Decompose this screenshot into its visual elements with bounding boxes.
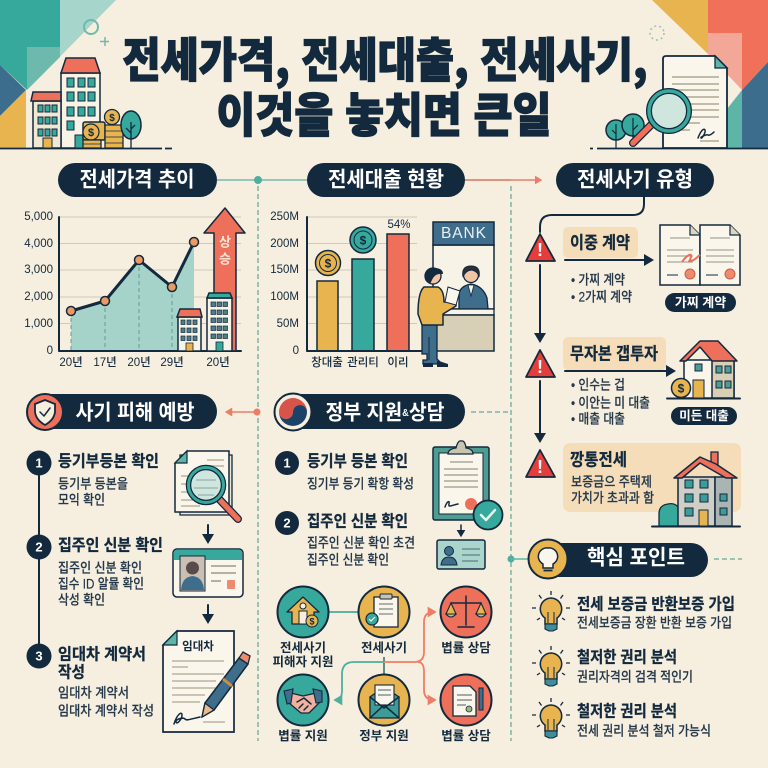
line chart: 전세가격 추이: 0 — [47, 345, 53, 357]
title: 전세가격, 전세대출, 전세사기, — [122, 22, 648, 91]
bar chart: 전세대출 현황: 50M — [277, 318, 299, 330]
step 1 — [275, 451, 414, 492]
step 1: 1 — [35, 456, 43, 470]
title — [122, 22, 648, 146]
key point 2: 철저한 권리 분석 — [577, 648, 677, 666]
line chart: 전세가격 추이: 29년 — [160, 355, 184, 369]
fraud type: 무자본 갭투자: 미든 대출 — [679, 409, 729, 423]
step 2: 2 — [35, 540, 43, 554]
heading: 핵심 포인트 — [508, 540, 742, 578]
bar chart: 전세대출 현황: 200M — [270, 238, 299, 250]
header corner pattern: right — [650, 0, 768, 148]
heading: 전세가격 추이 — [58, 163, 217, 197]
icon: lease contract and pen: 임대차 — [182, 639, 214, 653]
icon: bulb — [532, 591, 570, 631]
bar chart: 전세대출 현황 — [270, 211, 421, 369]
step 3: 임대차 계약서 작성 — [58, 704, 154, 718]
step 1 — [26, 450, 159, 508]
heading: 정부 지원&상담: 정부 지원&상담 — [326, 402, 444, 424]
icon: clipboard with check — [433, 441, 502, 530]
step 3: 임대차 계약서 — [58, 686, 129, 700]
icon: city buildings and coins: $ — [88, 127, 94, 139]
fraud type: 깡통전세 — [526, 443, 741, 526]
line chart: 전세가격 추이: 5,000 — [24, 211, 53, 223]
circle: 전세사기 — [358, 586, 410, 655]
step 2: 집주인 신분 확인 — [58, 536, 163, 554]
step 2: 집주인 신분 확인 — [307, 552, 389, 568]
circle: 볍률 상담 (document): 볍률 상담 — [441, 729, 491, 743]
bar chart: 전세대출 현황: 관리티 — [347, 356, 379, 369]
section divider lines — [258, 186, 511, 741]
icon: document, magnifier, trees — [606, 56, 727, 148]
bar chart: 전세대출 현황: $ — [360, 234, 367, 248]
fraud type: 깡통전세: ! — [537, 457, 543, 477]
arrow: clipboard to ID — [460, 525, 462, 535]
step 1: 등기부 등본을 — [58, 476, 128, 492]
line chart: 전세가격 추이: 20년 — [206, 355, 230, 369]
heading: 사기 피해 예방 — [27, 394, 217, 430]
fraud type: 이중 계약: ! — [537, 240, 543, 260]
circle: 볍률 상담 (scales) — [440, 586, 492, 655]
heading: 전세대출 현황 — [307, 163, 465, 197]
step 1: 등기부등본 확인 — [58, 452, 159, 470]
fraud type: 무자본 갭투자: • 매출 대출 — [571, 412, 625, 426]
panel: 정부 지원 steps — [275, 451, 415, 568]
arrow: to 깡통전세 — [539, 381, 541, 440]
fraud type: 무자본 갭투자: ! — [537, 357, 543, 377]
fraud type: 무자본 갭투자: • 이안는 미 대출 — [571, 396, 650, 410]
key point 3: 철저한 권리 분석 — [577, 702, 677, 720]
step 2: 집주인 신분 확인 — [307, 512, 408, 530]
fraud type: 무자본 갭투자 — [526, 337, 740, 426]
circle: 전세사기 피해자 지원 — [273, 586, 333, 669]
heading: 사기 피해 예방: 사기 피해 예방 — [76, 402, 194, 424]
header corner pattern: left — [0, 0, 116, 148]
line chart: 전세가격 추이: 2,000 — [24, 291, 53, 303]
line chart: 전세가격 추이: 3,000 — [24, 264, 53, 276]
circle: 정부 지원 (envelope): 정부 지원 — [359, 729, 409, 743]
icon: bulb — [532, 698, 570, 738]
step 2 — [26, 534, 163, 608]
key point 2 — [532, 646, 693, 686]
connector lines — [329, 612, 434, 700]
connector from heading — [540, 197, 644, 232]
arrow: to 무자본 갭투자 — [539, 265, 541, 340]
heading: 전세가격 추이: 전세가격 추이 — [80, 168, 194, 192]
ground lines — [0, 148, 768, 150]
key point 3 — [532, 698, 711, 738]
title: 이것을 놓치면 큰일 — [216, 77, 552, 146]
step 2: 삭성 확인 — [58, 592, 105, 608]
step 2: 집주인 신분 확인 — [58, 560, 142, 576]
line chart: 전세가격 추이: 4,000 — [24, 238, 53, 250]
key point 2: 권리자격의 검격 적인기 — [577, 670, 693, 684]
line chart: 전세가격 추이: 20년 — [127, 355, 151, 369]
step 1: 등기부 등본 확인 — [307, 452, 408, 470]
fraud type: 깡통전세: 가치가 초과과 함 — [571, 490, 654, 506]
circle: 정부 지원 (envelope) — [358, 674, 410, 743]
fraud type: 이중 계약: • 가찌 계약 — [571, 272, 625, 288]
key point 3: 전세 권리 분석 철저 가능식 — [577, 724, 711, 738]
icon: bulb — [532, 646, 570, 686]
fraud type: 이중 계약 — [526, 225, 740, 312]
bar chart: 전세대출 현황: 창대출 — [311, 355, 343, 369]
step 2: 집수 ID 알뮬 확인 — [58, 576, 144, 592]
step 3 — [26, 644, 154, 718]
circle: 전세사기 피해자 지원: 전세사기 — [280, 640, 326, 655]
step 1: 모익 확인 — [58, 492, 105, 508]
illustration: bank counter — [418, 222, 494, 367]
step 2: 집주인 신분 확인 초견 — [307, 536, 415, 550]
arrow: document to ID — [207, 525, 209, 541]
fraud type: 무자본 갭투자: $ — [678, 382, 685, 396]
fraud type: 깡통전세: 깡통전세 — [570, 450, 627, 470]
bar chart: 전세대출 현황: 100M — [270, 291, 299, 303]
line chart: 전세가격 추이 — [24, 208, 245, 369]
heading: 전세사기 유형: 전세사기 유형 — [577, 168, 693, 192]
key point 1 — [532, 591, 735, 631]
fraud type: 깡통전세: 보증금으 주택제 — [571, 474, 652, 490]
circle: 전세사기 피해자 지원: $ — [309, 616, 315, 626]
line chart: 전세가격 추이: 1,000 — [24, 318, 53, 330]
step 3: 3 — [35, 648, 43, 664]
step 3: 작성 — [58, 664, 85, 682]
circle: 볍률 상담 (scales): 볍률 상담 — [441, 641, 491, 655]
step 2: 2 — [283, 516, 291, 530]
icon: city buildings and coins — [31, 58, 141, 148]
bar chart: 전세대출 현황: 54% — [387, 219, 411, 231]
heading: 정부 지원&상담 — [274, 394, 511, 430]
panel: 지원 circles — [273, 586, 492, 743]
heading: 핵심 포인트: 핵심 포인트 — [587, 546, 685, 570]
circle: 볍률 지원 (handshake): 볍률 지원 — [278, 729, 328, 743]
fraud type: 이중 계약: 가찌 계약 — [675, 295, 726, 310]
line chart: 전세가격 추이: 상 — [219, 234, 231, 250]
step 3: 임대차 계약서 — [58, 646, 146, 664]
step 1: 징기부 등기 확항 확성 — [307, 476, 414, 492]
step 1: 1 — [283, 456, 291, 470]
bar chart: 전세대출 현황: 0 — [293, 345, 299, 357]
bar chart: 전세대출 현황: 150M — [270, 264, 299, 276]
bar chart: 전세대출 현황: 250M — [270, 211, 299, 223]
line chart: 전세가격 추이: 20년 — [59, 355, 83, 369]
bar chart: 전세대출 현황: $ — [325, 256, 332, 270]
illustration: bank counter: BANK — [441, 225, 487, 242]
icon: ID card — [173, 549, 243, 597]
panel: 전세사기 유형 — [526, 197, 741, 526]
circle: 볍률 지원 (handshake) — [278, 674, 328, 743]
circle: 볍률 상담 (document) — [440, 674, 492, 743]
fraud type: 이중 계약: 이중 계약 — [570, 234, 630, 252]
icon: lease contract and pen — [163, 631, 250, 732]
key point 1: 전세보증금 장환 반환 보증 가입 — [577, 616, 732, 630]
step 2 — [275, 511, 415, 568]
heading: 전세사기 유형 — [556, 163, 714, 197]
bar chart: 전세대출 현황: 이리 — [387, 356, 409, 369]
connector: price to loan — [217, 176, 540, 184]
line chart: 전세가격 추이: 17년 — [93, 355, 117, 369]
line chart: 전세가격 추이: 승 — [219, 252, 231, 266]
circle: 전세사기 피해자 지원: 피해자 지원 — [273, 654, 333, 669]
icon: document with magnifier — [175, 451, 238, 519]
icon: small ID card — [437, 540, 485, 569]
panel: 사기 피해 예방 steps — [26, 450, 163, 718]
fraud type: 이중 계약: • 2가찌 계약 — [571, 290, 632, 304]
circle: 전세사기: 전세사기 — [361, 640, 407, 655]
key point 1: 전세 보증금 반환보증 가입 — [577, 596, 735, 614]
arrow: ID to contract — [207, 605, 209, 621]
icon: city buildings and coins: $ — [109, 113, 115, 124]
fraud type: 무자본 갭투자: • 인수는 겁 — [571, 378, 625, 392]
fraud type: 무자본 갭투자: 무자본 갭투자 — [570, 344, 658, 364]
connector: arrow to 사기 피해 예방 — [227, 408, 260, 416]
heading: 전세대출 현황: 전세대출 현황 — [328, 168, 444, 192]
